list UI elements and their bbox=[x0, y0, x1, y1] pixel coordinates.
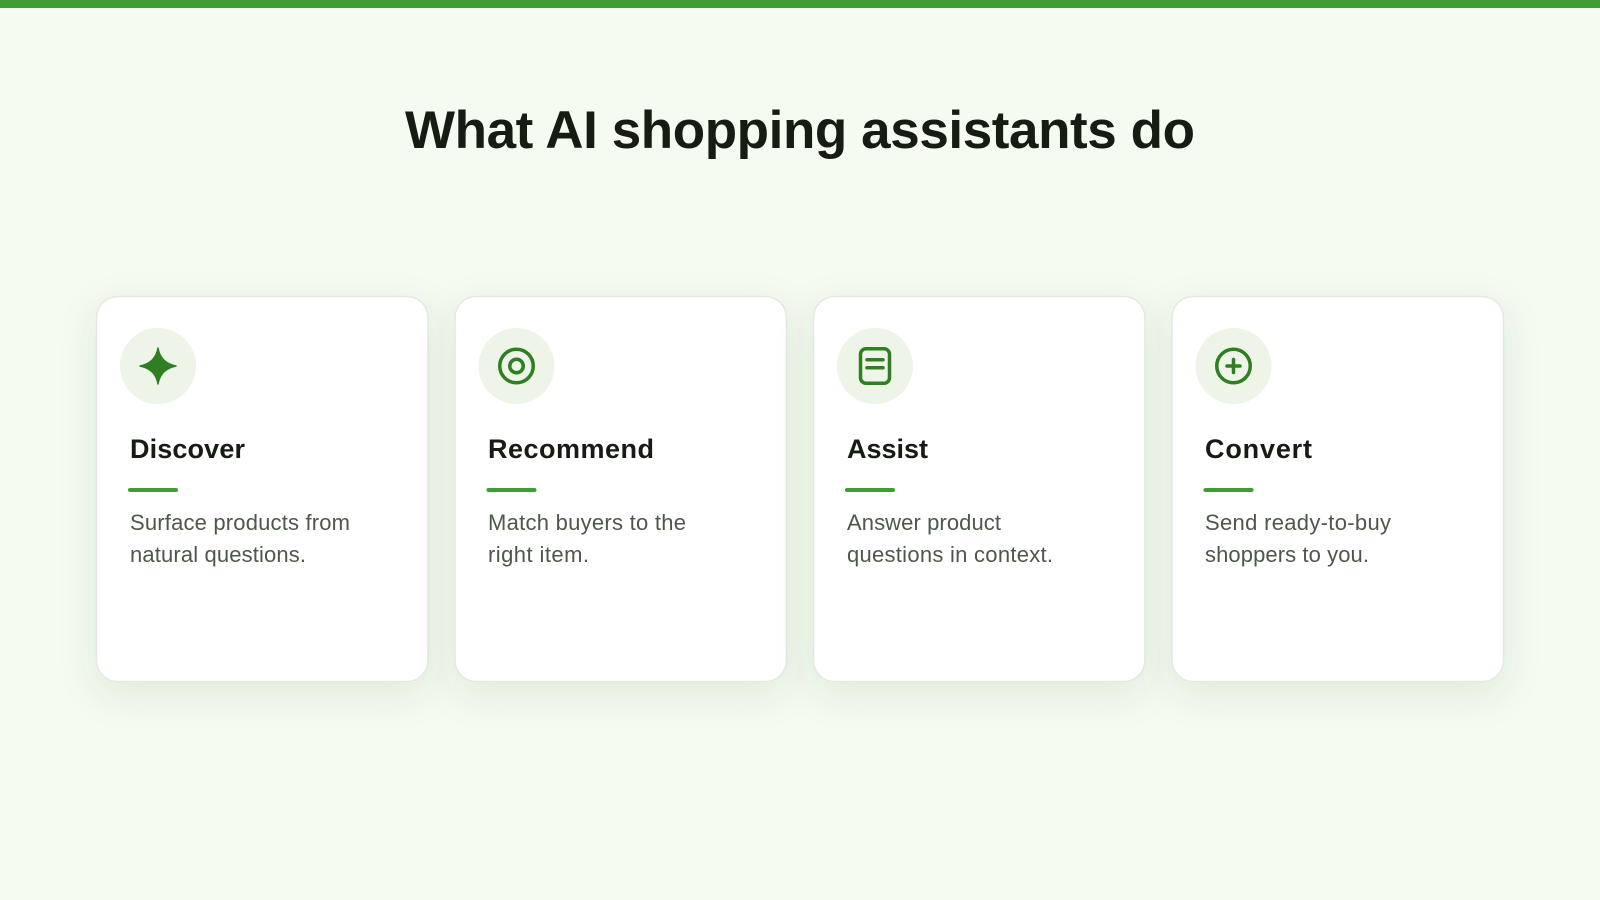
text: Assist description: Answer product bbox=[847, 510, 1001, 535]
text: Recommend description bbox=[488, 510, 686, 567]
text: Convert description: shoppers to you. bbox=[1205, 542, 1369, 567]
text: Assist description: questions in context. bbox=[847, 542, 1053, 567]
text: Discover description bbox=[130, 510, 350, 567]
divider bbox=[845, 488, 895, 492]
divider bbox=[128, 488, 178, 492]
heading: Recommend: Recommend bbox=[488, 434, 654, 464]
text: Assist description bbox=[847, 510, 1053, 567]
divider bbox=[486, 488, 536, 492]
panel: Discover bbox=[96, 296, 428, 682]
icon: plus circle bbox=[1196, 328, 1272, 404]
text: Convert description bbox=[1205, 510, 1391, 567]
heading: Assist: Assist bbox=[847, 434, 928, 464]
divider bbox=[1204, 488, 1254, 492]
icon: sparkle bbox=[120, 328, 196, 404]
heading: Convert: Convert bbox=[1205, 434, 1312, 464]
heading: Discover: Discover bbox=[130, 434, 245, 464]
text: Discover description: natural questions. bbox=[130, 542, 306, 567]
text: Recommend description: right item. bbox=[488, 542, 589, 567]
icon: target bbox=[478, 328, 554, 404]
panel: Assist bbox=[814, 296, 1145, 682]
text: Discover description: Surface products from bbox=[130, 510, 350, 535]
top accent bar bbox=[0, 0, 1600, 8]
panel: Convert bbox=[1172, 296, 1504, 682]
title: What AI shopping assistants do bbox=[405, 101, 1195, 160]
icon: document bbox=[837, 328, 913, 404]
panel: Recommend bbox=[455, 296, 786, 682]
text: Convert description: Send ready-to-buy bbox=[1205, 510, 1391, 535]
text: Recommend description: Match buyers to the bbox=[488, 510, 686, 535]
